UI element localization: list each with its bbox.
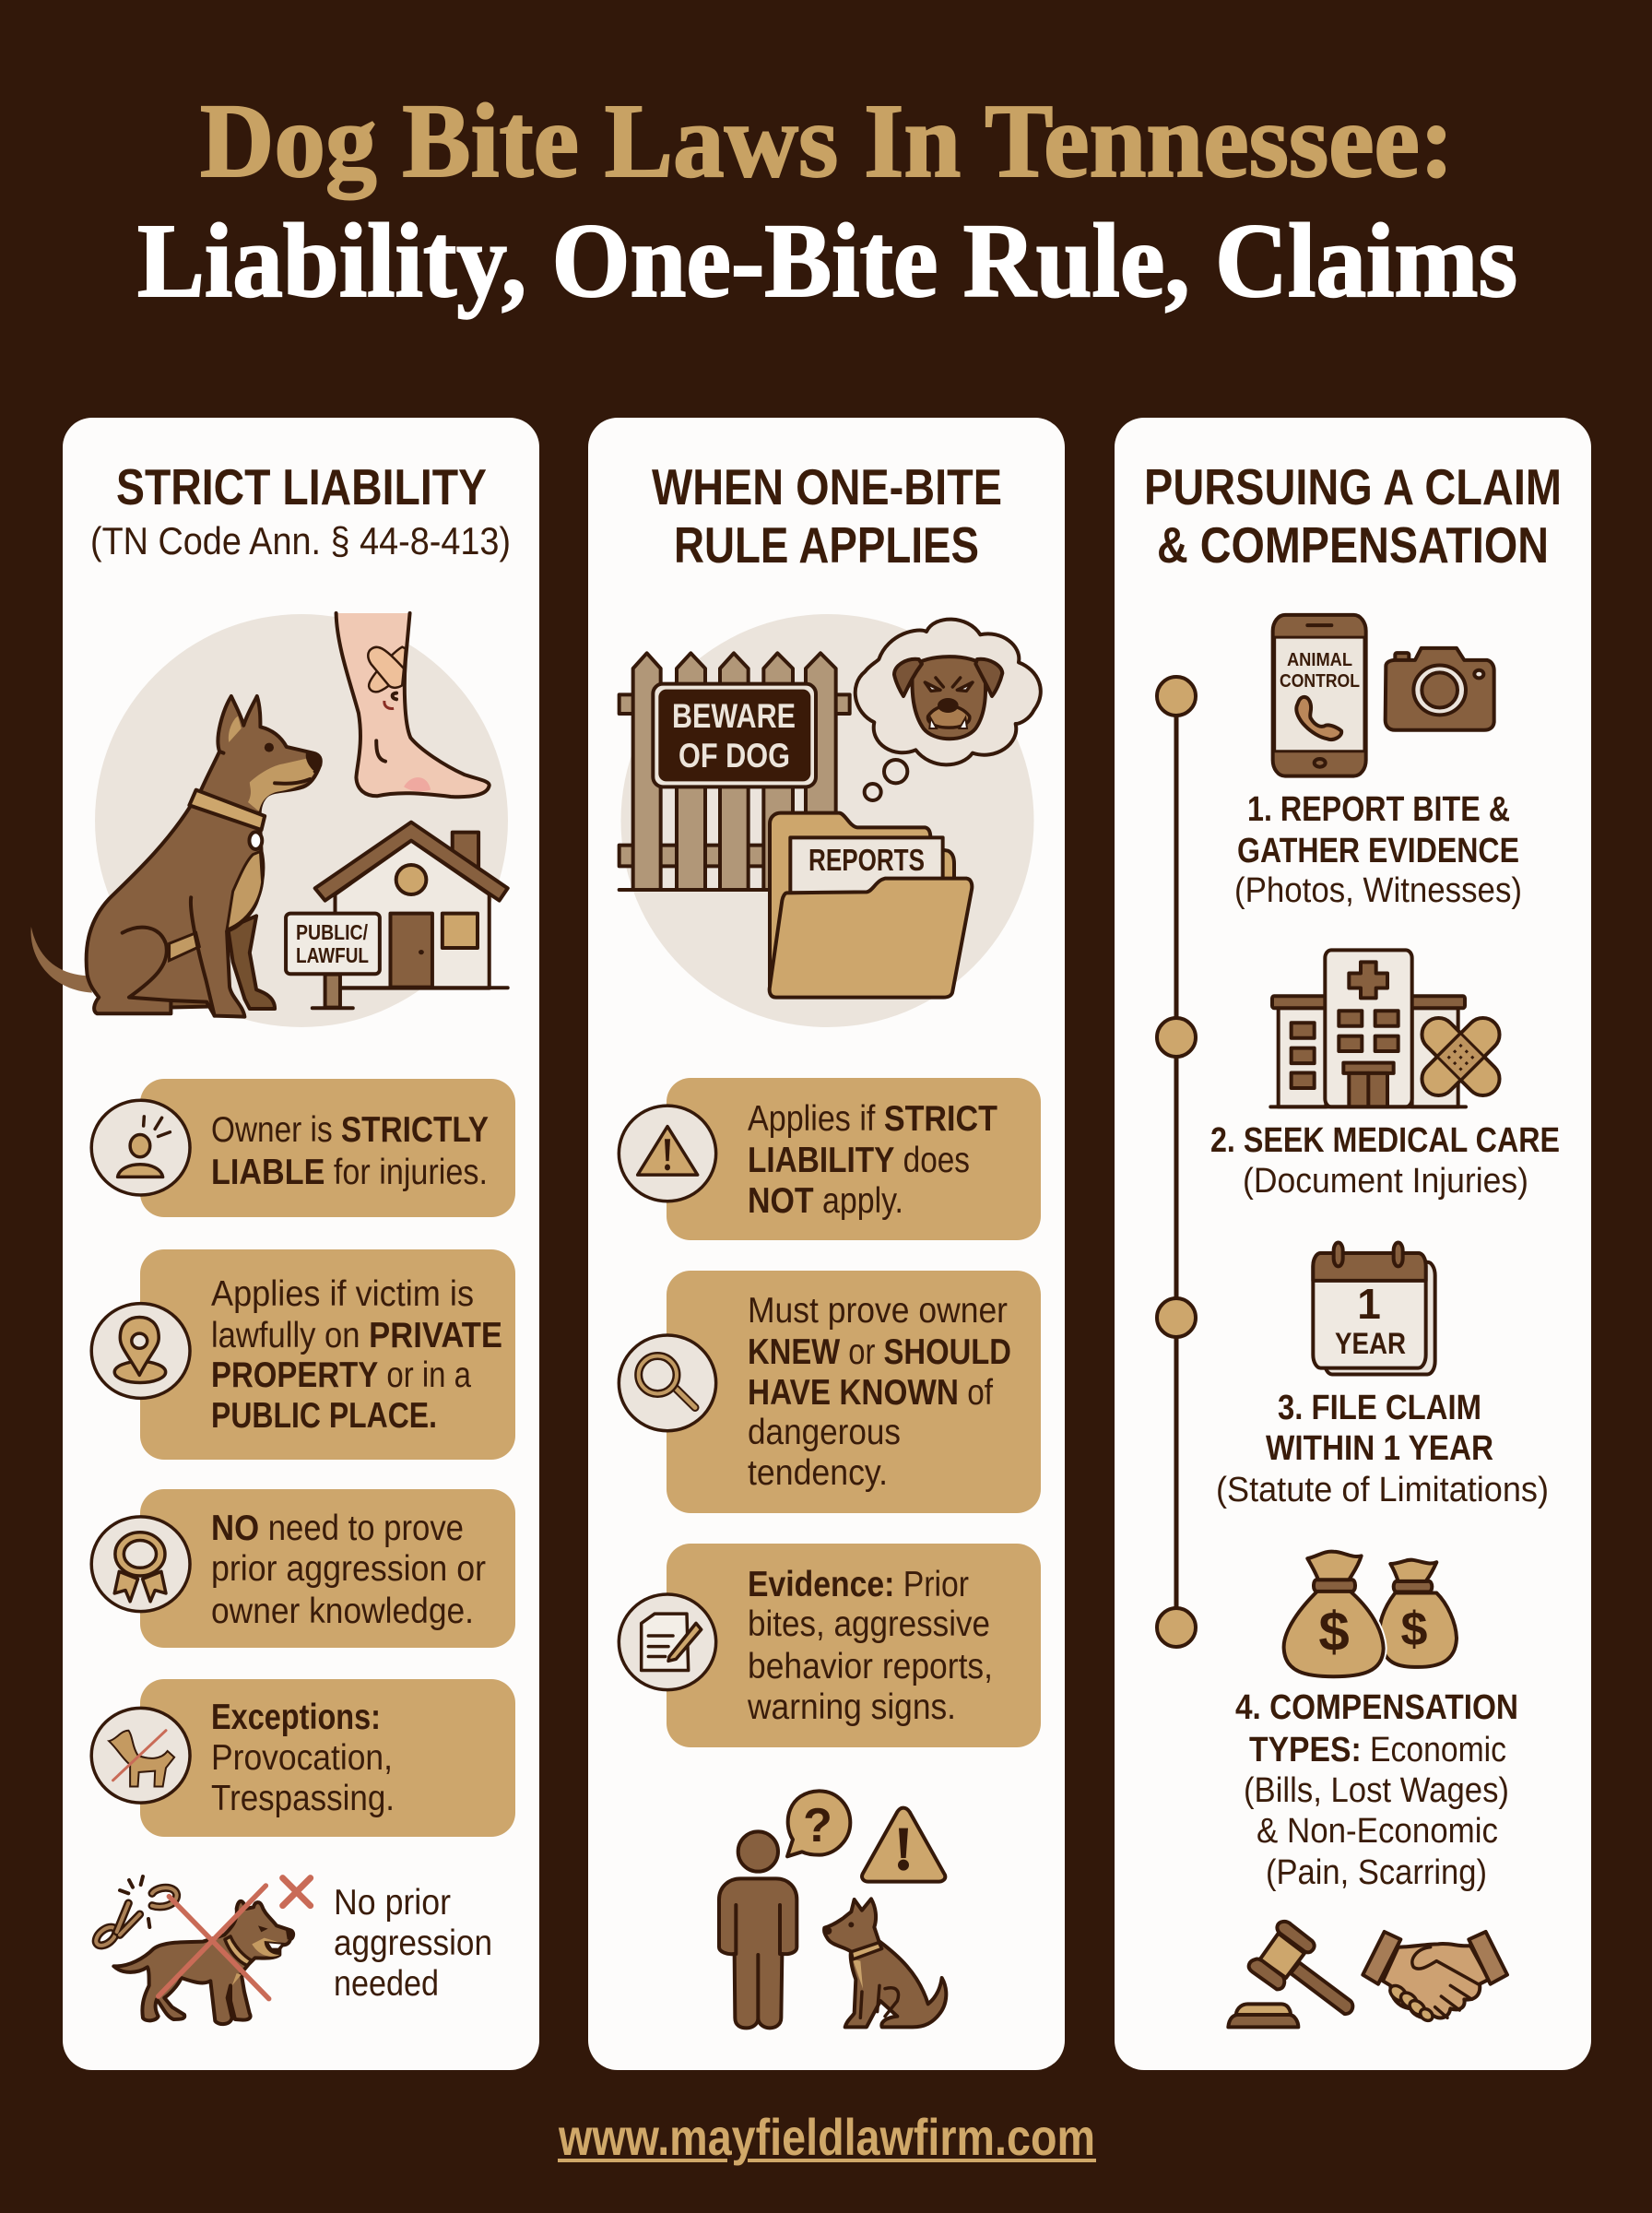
- icon: person: [719, 1831, 796, 2028]
- icon: hospital and bandage: [1270, 950, 1528, 1125]
- pill: private property: PROPERTY or in a: [211, 1355, 471, 1395]
- pill: must prove knowledge: tendency.: [748, 1453, 888, 1493]
- folder: [770, 813, 972, 998]
- pill: private property: lawfully on PRIVATE: [211, 1316, 502, 1355]
- step 4: compensation: (Pain, Scarring): [1266, 1853, 1487, 1892]
- footer url: www.mayfieldlawfirm.com: [558, 2108, 1095, 2166]
- icon: red cross: [159, 1878, 311, 1999]
- graphic: person questioning and dog: [719, 1791, 946, 2028]
- icon: phone: [1273, 615, 1366, 776]
- pill: strict liability does not apply: NOT apply.: [748, 1181, 903, 1221]
- dog: sitting dog: [31, 696, 321, 1017]
- step 1: report bite: ANIMAL: [1287, 650, 1352, 670]
- step 1: report bite: [1234, 615, 1522, 910]
- pill: must prove knowledge: KNEW or SHOULD: [748, 1332, 1011, 1372]
- icon: calendar: [1313, 1243, 1435, 1374]
- sign post: [286, 914, 380, 1008]
- icon: angry dog head: [894, 657, 1002, 739]
- pill: strictly liable: Owner is STRICTLY: [211, 1110, 489, 1150]
- pill: must prove knowledge: dangerous: [748, 1413, 901, 1452]
- heading: one-bite rule: RULE APPLIES: [674, 516, 979, 574]
- icon: gavel: [1228, 1922, 1352, 2027]
- pill: exceptions: Trespassing.: [211, 1779, 395, 1818]
- step 2: seek medical care: (Document Injuries): [1243, 1162, 1528, 1201]
- title: Dog Bite Laws In Tennessee:: [200, 82, 1454, 199]
- heading: one-bite rule: WHEN ONE-BITE: [652, 458, 1002, 515]
- step 1: report bite: CONTROL: [1280, 671, 1360, 692]
- icon: rosette: [91, 1517, 190, 1612]
- pill: private property: PUBLIC PLACE.: [211, 1396, 437, 1436]
- icon: calendar: 1: [1357, 1280, 1381, 1328]
- sign text: [296, 920, 369, 967]
- pill: no need to prove: owner knowledge.: [211, 1592, 474, 1631]
- pill: no need to prove: [91, 1489, 515, 1648]
- pill: strict liability does not apply: Applies if STRICT: [748, 1099, 997, 1139]
- title: [137, 82, 1517, 319]
- thought cloud: [856, 620, 1041, 800]
- pill: strict liability does not apply: [619, 1078, 1041, 1240]
- caption: no prior aggression: aggression: [334, 1923, 492, 1963]
- step 4: compensation: (Bills, Lost Wages): [1244, 1771, 1509, 1810]
- icon: broken chain: [93, 1876, 177, 1949]
- title: Liability, One-Bite Rule, Claims: [137, 202, 1517, 319]
- caption: no prior aggression: [334, 1883, 492, 2004]
- sign and folder labels: [672, 697, 925, 877]
- icon: location pin: [91, 1304, 190, 1398]
- pill: private property: Applies if victim is: [211, 1274, 474, 1314]
- pill: exceptions: Exceptions:: [211, 1698, 381, 1737]
- icon: money bags: $: [1401, 1603, 1428, 1656]
- pill: exceptions: [91, 1679, 515, 1837]
- caption: no prior aggression: No prior: [334, 1883, 451, 1923]
- pill: exceptions: Provocation,: [211, 1738, 393, 1778]
- pill: private property: [91, 1249, 515, 1460]
- caption: no prior aggression: needed: [334, 1964, 439, 2004]
- pill: evidence: behavior reports,: [748, 1647, 993, 1686]
- question mark: ?: [803, 1799, 832, 1852]
- step 4: compensation: TYPES: Economic: [1249, 1731, 1506, 1769]
- step 2: seek medical care: 2. SEEK MEDICAL CARE: [1210, 1121, 1560, 1160]
- pill: no need to prove: NO need to prove: [211, 1509, 464, 1548]
- sign and folder labels: OF DOG: [678, 737, 790, 775]
- heading: strict liability: STRICT LIABILITY: [116, 458, 487, 515]
- pill: evidence: Evidence: Prior: [748, 1565, 969, 1604]
- illustration: dog, injured leg, house: [31, 613, 508, 1027]
- panel: one-bite rule: [558, 418, 1591, 2166]
- icon: sitting dog: [824, 1899, 946, 2027]
- pill: evidence: warning signs.: [747, 1687, 956, 1727]
- illustration: fence, thought cloud, folder: [620, 614, 1041, 1027]
- panel: pursuing a claim: [1115, 418, 1591, 2070]
- beware sign plate: [653, 684, 816, 787]
- sign text: LAWFUL: [296, 943, 369, 967]
- icon: document and pen: [619, 1594, 716, 1690]
- pill: must prove knowledge: HAVE KNOWN of: [748, 1373, 993, 1413]
- heading: pursuing a claim: PURSUING A CLAIM: [1144, 458, 1562, 515]
- icon: snarling dog: [113, 1901, 294, 2024]
- icon: speech bubble: [787, 1791, 850, 1856]
- timeline: [1157, 677, 1196, 1647]
- step 2: seek medical care: [1210, 950, 1560, 1201]
- pill: must prove knowledge: Must prove owner: [748, 1291, 1008, 1331]
- sign and folder labels: BEWARE: [672, 697, 796, 735]
- icon: warning triangle: [862, 1808, 945, 1882]
- step 1: report bite: GATHER EVIDENCE: [1237, 832, 1519, 870]
- step 3: file claim: [1216, 1243, 1549, 1509]
- step 3: file claim: 3. FILE CLAIM: [1278, 1389, 1481, 1427]
- panel: strict liability: [31, 418, 1591, 2166]
- pill: must prove knowledge: [619, 1271, 1041, 1513]
- icon: money bags: [1284, 1552, 1457, 1676]
- icon: money bags: $: [1318, 1601, 1350, 1663]
- icon: person: [91, 1100, 190, 1195]
- icon: dog crossed out: [91, 1708, 190, 1803]
- step 3: file claim: (Statute of Limitations): [1216, 1471, 1549, 1509]
- heading: strict liability: [90, 458, 511, 562]
- pill: strictly liable: [91, 1079, 515, 1217]
- icon: camera: [1386, 648, 1494, 730]
- heading: pursuing a claim: [1144, 458, 1562, 574]
- icon: handshake: [1363, 1932, 1507, 2023]
- pill: strict liability does not apply: LIABILITY does: [748, 1141, 970, 1180]
- sign and folder labels: REPORTS: [808, 843, 925, 877]
- icon: magnifying glass: [619, 1335, 716, 1431]
- leg: injured leg with bandage: [336, 613, 490, 797]
- heading: pursuing a claim: & COMPENSATION: [1157, 516, 1549, 574]
- step 1: report bite: (Photos, Witnesses): [1234, 871, 1522, 910]
- step 3: file claim: WITHIN 1 YEAR: [1266, 1429, 1493, 1468]
- step 4: compensation: [1235, 1552, 1518, 1892]
- house: [315, 822, 508, 988]
- fence: [620, 653, 850, 890]
- step 4: compensation: 4. COMPENSATION: [1235, 1688, 1518, 1727]
- pill: evidence: bites, aggressive: [748, 1604, 990, 1644]
- step 1: report bite: 1. REPORT BITE &: [1247, 790, 1510, 829]
- icon: calendar: YEAR: [1335, 1327, 1406, 1360]
- heading: strict liability: (TN Code Ann. § 44-8-413): [90, 519, 511, 562]
- pill: evidence: [619, 1544, 1041, 1747]
- graphic: aggressive dog crossed out: [93, 1876, 492, 2024]
- icon: warning: [619, 1106, 716, 1201]
- heading: one-bite rule: [652, 458, 1002, 574]
- pill: no need to prove: prior aggression or: [211, 1549, 486, 1589]
- step 4: compensation: & Non-Economic: [1257, 1812, 1498, 1851]
- pill: strictly liable: LIABLE for injuries.: [211, 1153, 488, 1192]
- sign text: PUBLIC/: [296, 920, 369, 944]
